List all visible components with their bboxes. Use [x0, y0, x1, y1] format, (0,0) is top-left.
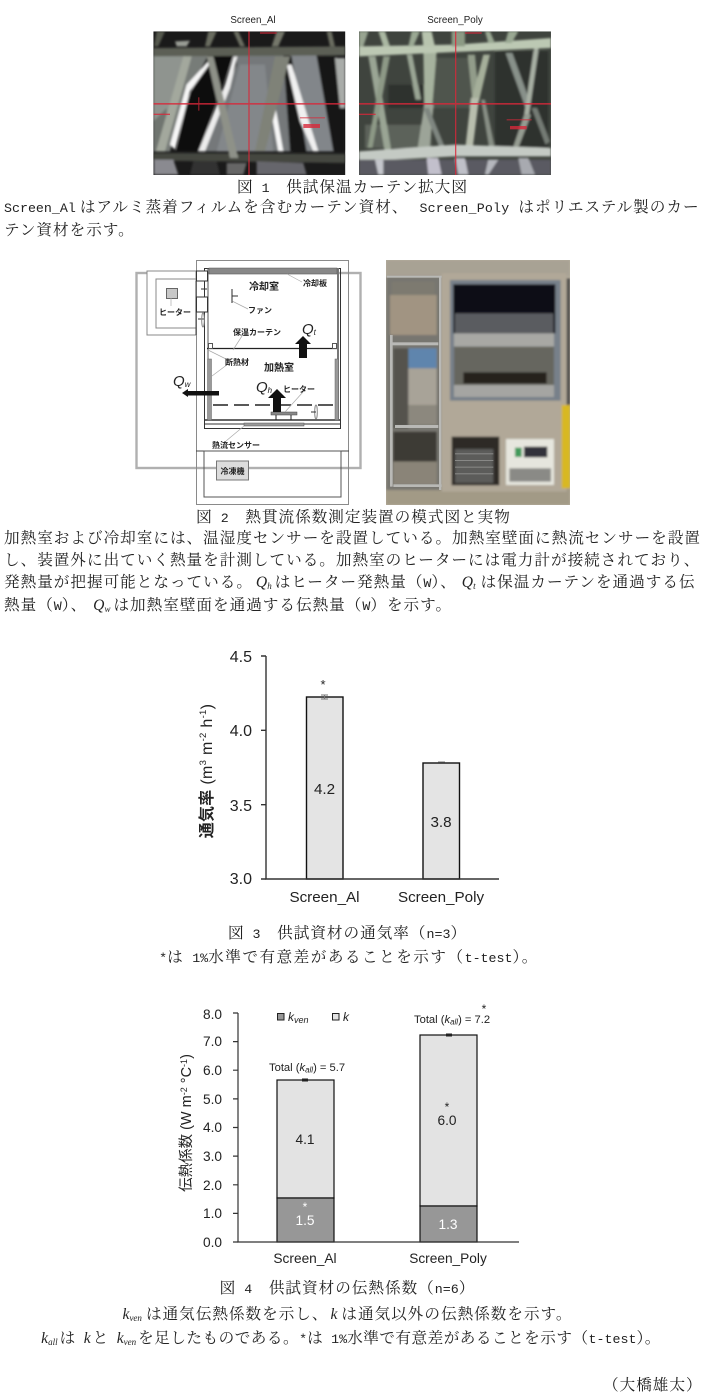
text: figure 2 note: 熱量（W）、 Qwは加熱室壁面を通過する伝熱量（W）を示す。: [4, 597, 452, 615]
arrow: Qw: [182, 389, 219, 397]
caption: figure 1: 図 1 供試保温カーテン拡大図: [237, 179, 468, 197]
y axis title: -1: [179, 1059, 189, 1067]
Q symbols: Q: [256, 379, 268, 396]
text: figure 4 note line 1: kven は通気伝熱係数を示し、k は通気以外の伝熱係数を示す。: [123, 1306, 572, 1324]
category labels: Screen_Al: [289, 889, 360, 906]
legend: k: [343, 1010, 350, 1024]
value labels: 1.3: [438, 1217, 458, 1232]
tick labels: [203, 1007, 222, 1250]
y axis title: °C: [179, 1067, 195, 1087]
Q symbols: Q: [173, 373, 185, 390]
value labels: 6.0: [437, 1113, 457, 1128]
tick labels: 6.0: [203, 1063, 222, 1078]
heater box square: [166, 288, 178, 298]
photo: Screen_Al: [153, 31, 345, 175]
fans: [198, 289, 317, 419]
tick labels: 3.0: [230, 871, 252, 888]
figure 4: heat transfer coefficient stacked bar chart: [178, 1002, 519, 1266]
total labels: *: [482, 1002, 487, 1016]
category labels: [289, 889, 484, 906]
text: figure 4 note line 2: kallは kと kvenを足したものである。*は 1%水準で有意差があることを示す（t-test）。: [41, 1330, 661, 1348]
category labels: Screen_Al: [273, 1251, 337, 1266]
y axis title: -1: [198, 709, 209, 718]
legend: [278, 1010, 350, 1025]
heat flux sensor: [244, 423, 304, 426]
diagram labels: 加熱室: [264, 361, 294, 374]
value labels: *: [445, 1100, 450, 1114]
diagram labels: ヒーター: [283, 384, 315, 394]
total labels: all: [305, 1066, 313, 1074]
axes: [233, 1013, 519, 1242]
y axis title: -2: [179, 1087, 189, 1095]
dashed shelf: [213, 404, 333, 406]
tick labels: 3.5: [230, 798, 252, 815]
diagram labels: 冷却板: [303, 278, 327, 288]
curtain: [207, 344, 337, 348]
diagram labels: ヒーター: [159, 307, 191, 317]
caption: figure 3: 図 3 供試資材の通気率（n=3）: [228, 925, 467, 943]
tick labels: 4.5: [230, 649, 252, 666]
leader lines: [171, 274, 303, 441]
value labels: 1.5: [295, 1213, 315, 1228]
diagram labels: 熱流センサー: [212, 440, 260, 450]
tick labels: 0.0: [203, 1235, 222, 1250]
caption: figure 2: 図 2 熱貫流係数測定装置の模式図と実物: [196, 509, 511, 527]
value labels: 4.2: [314, 781, 335, 798]
total labels: Total (k: [414, 1014, 450, 1026]
total labels: ) = 5.7: [313, 1062, 345, 1074]
Q symbols: h: [268, 386, 273, 395]
tick labels: 2.0: [203, 1178, 222, 1193]
total labels: all: [450, 1018, 458, 1026]
y axis title: ): [179, 1054, 195, 1059]
total labels: [269, 1002, 490, 1074]
text: figure 2 note: し、装置外に出ていく熱量を計測している。加熱室のヒーターには電力計が接続されており、: [4, 552, 700, 570]
text: figure 1 note: テン資材を示す。: [4, 222, 135, 240]
refrigerator box: 冷凍機: [220, 466, 244, 476]
gray outer frame: [136, 273, 360, 468]
y axis title: m: [199, 741, 216, 760]
error bars: [302, 1034, 452, 1082]
Q symbols: t: [314, 328, 317, 337]
y axis title: h: [199, 718, 216, 732]
label: Screen_Poly: Screen_Poly: [427, 15, 483, 26]
Q symbols: [173, 321, 317, 396]
tick labels: 4.0: [230, 723, 252, 740]
arrow: Qt: [295, 336, 311, 358]
y axis title: 伝熱係数 (W m: [179, 1095, 195, 1192]
bars: [306, 697, 460, 879]
Q symbols: w: [185, 380, 192, 389]
photo: apparatus: [386, 260, 570, 505]
tick labels: 1.0: [203, 1206, 222, 1221]
text: figure 3 note: *は 1%水準で有意差があることを示す（t-test）。: [159, 949, 539, 967]
text: figure 2 note: 発熱量が把握可能となっている。Qhはヒーター発熱量（W）、 Qt は保温カーテンを通過する伝: [4, 574, 696, 592]
diagram labels: 保温カーテン: [233, 327, 281, 337]
y axis title: 3: [198, 760, 209, 765]
tick labels: 5.0: [203, 1092, 222, 1107]
text: figure 1 note: [4, 198, 700, 240]
y axis title: ): [199, 704, 216, 709]
axes: [261, 656, 499, 879]
arrow: Qh: [268, 389, 286, 412]
value labels: 4.1: [295, 1132, 315, 1147]
diagram labels: [159, 278, 327, 450]
tick labels: 4.0: [203, 1120, 222, 1135]
category labels: Screen_Poly: [409, 1251, 487, 1266]
refrigerator box: [216, 461, 248, 480]
text: figure 2 note: 加熱室および冷却室には、温湿度センサーを設置している。加熱室壁面に熱流センサーを設置: [4, 530, 701, 548]
tick labels: 8.0: [203, 1007, 222, 1022]
label: Screen_Al: Screen_Al: [230, 15, 276, 26]
Q symbols: Q: [302, 321, 314, 338]
figure 1: magnified curtain photos: [153, 15, 551, 175]
category labels: [273, 1251, 487, 1266]
diagram labels: 断熱材: [225, 357, 249, 367]
value labels: [314, 781, 452, 831]
value labels: [295, 1100, 458, 1232]
tick labels: 7.0: [203, 1034, 222, 1049]
category labels: Screen_Poly: [398, 889, 484, 906]
text: figure 2 note: [4, 530, 701, 615]
text: figure 1 note: Screen_Al はアルミ蒸着フィルムを含むカーテン資材、 Screen_Poly はポリエステル製のカー: [4, 199, 700, 217]
value labels: 3.8: [430, 814, 452, 831]
cooling plate: [209, 268, 337, 274]
value labels: *: [303, 1200, 308, 1214]
tick labels: [230, 649, 252, 888]
legend: k: [288, 1010, 294, 1024]
tick labels: 3.0: [203, 1149, 222, 1164]
figure 3: ventilation rate bar chart: [198, 649, 499, 906]
y axis title: -2: [198, 732, 209, 741]
caption: figure 4: 図 4 供試資材の伝熱係数（n=6）: [220, 1280, 475, 1298]
insulation: [208, 359, 338, 420]
figure 2: schematic of the heat transmission test apparatus: [135, 260, 570, 505]
total labels: Total (k: [269, 1062, 305, 1074]
significance star: *: [320, 677, 326, 692]
legend: ven: [294, 1015, 309, 1025]
author: （大橋雄太）: [603, 1377, 703, 1395]
heater: [271, 412, 297, 420]
error bars: [321, 695, 445, 762]
diagram labels: ファン: [248, 306, 272, 315]
diagram labels: 冷却室: [249, 280, 279, 293]
y axis title: 通気率 (m: [199, 765, 216, 838]
stacked bars: [277, 1035, 477, 1242]
total labels: ) = 7.2: [458, 1014, 490, 1026]
photo: Screen_Poly: [359, 31, 551, 175]
